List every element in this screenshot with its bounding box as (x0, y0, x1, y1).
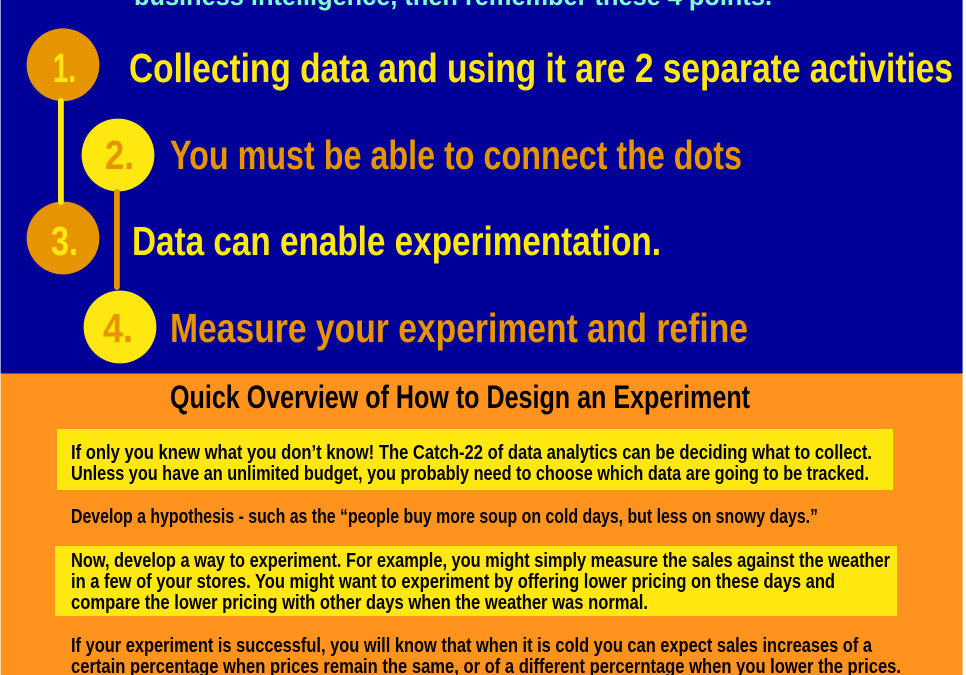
connector line: point 1 to 3 (58, 98, 64, 205)
point 2 text: You must be able to connect the dots (170, 132, 742, 178)
connector line: point 2 to 4 (114, 189, 120, 290)
badge 4 (84, 291, 156, 363)
badge 2 (82, 119, 154, 191)
callout: develop experiment (55, 546, 897, 616)
badge number 3: 3. (51, 218, 78, 264)
callout: what to collect (57, 429, 893, 490)
panel: orange experiment overview section (1, 374, 963, 675)
badge 3 (27, 202, 99, 274)
badge number 2: 2. (105, 132, 134, 178)
badge number 1: 1. (53, 45, 76, 91)
panel: blue key points section (1, 0, 963, 374)
badge number 4: 4. (103, 305, 133, 351)
badge 1 (27, 28, 99, 101)
section heading: Quick Overview of How to Design an Experiment (170, 379, 750, 415)
point 4 text: Measure your experiment and refine (170, 305, 748, 351)
point 3 text: Data can enable experimentation. (132, 218, 661, 264)
text block: successful experiment (71, 635, 901, 675)
callout: develop experiment: compare the lower pricing with other days when the weather was normal. (71, 592, 648, 614)
